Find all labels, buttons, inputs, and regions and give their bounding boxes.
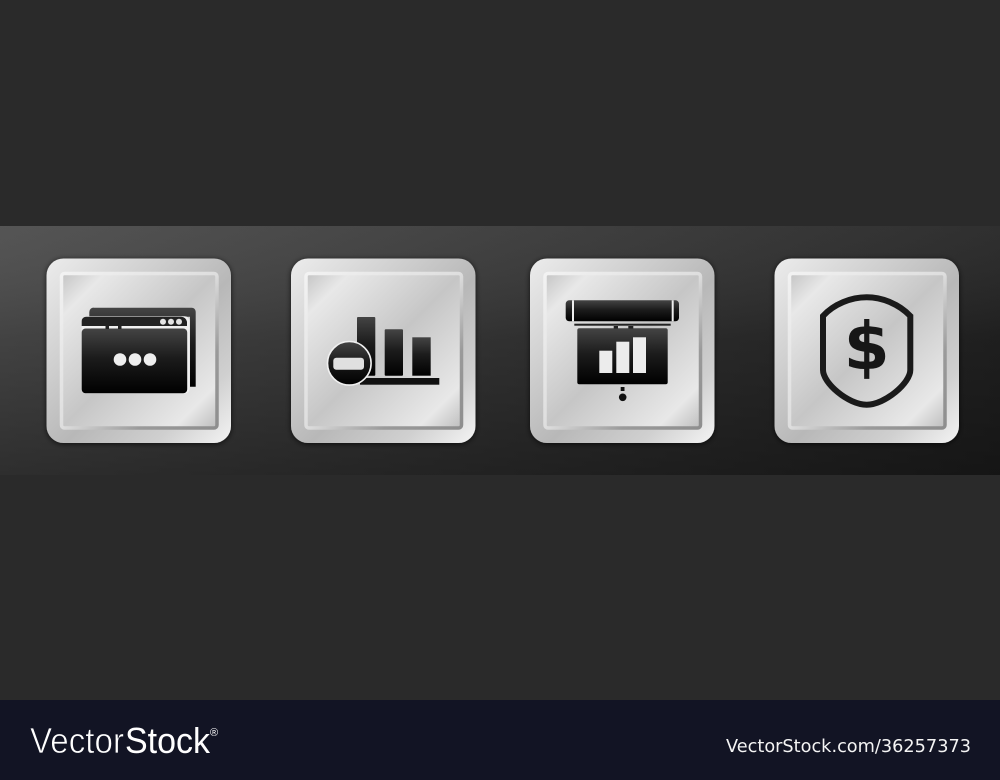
horizontal band — [0, 226, 1000, 475]
icon: browser windows with dots — [82, 308, 196, 394]
panel: browser windows tile — [46, 258, 231, 443]
panel: presentation screen tile — [530, 258, 714, 443]
logo wordmark: Stock — [125, 720, 211, 761]
icon: shield with dollar sign: $ — [844, 308, 890, 385]
icon: projector screen with bar chart — [566, 300, 679, 401]
panel: dollar shield tile — [774, 258, 959, 443]
logo wordmark: Vector — [30, 720, 124, 761]
icon: bar chart with minus badge — [328, 317, 439, 385]
logo wordmark — [30, 720, 218, 761]
image id text: VectorStock.com/36257373 — [726, 736, 971, 757]
footer bar — [0, 700, 1000, 780]
logo wordmark: ® — [210, 727, 218, 739]
panel: bar chart minus tile — [291, 258, 476, 443]
icon: shield with dollar sign — [823, 297, 910, 405]
